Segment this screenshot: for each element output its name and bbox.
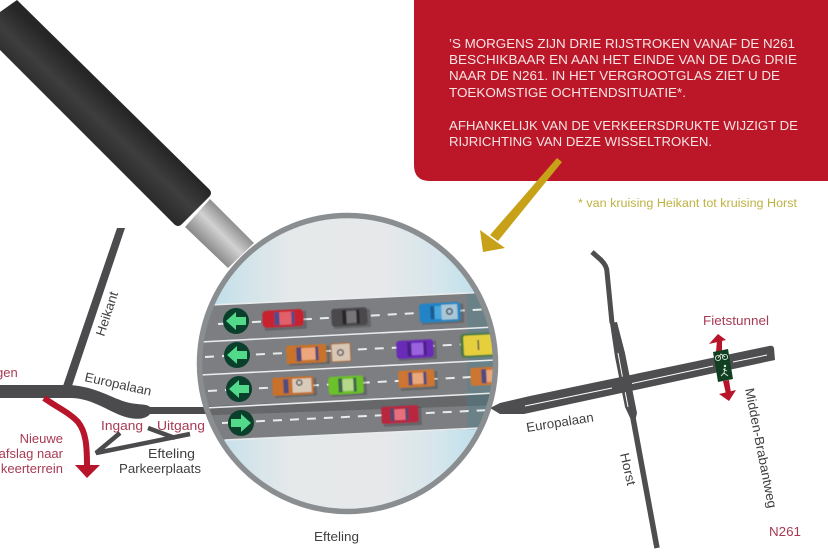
road: Heikant xyxy=(63,228,125,386)
car: orange, lane three centre xyxy=(398,369,438,391)
road: Efteling parking entrance and exit xyxy=(96,428,190,453)
road: Horst xyxy=(592,252,657,548)
road label: Europalaan east: Europalaan xyxy=(525,410,595,435)
car: dark grey xyxy=(331,307,371,329)
text: morning lanes explanation: RIJRICHTING VAN DEZE WISSELTROKEN. xyxy=(449,134,712,149)
label: Efteling Parkeerplaats xyxy=(119,446,202,476)
lens rim xyxy=(200,216,496,512)
label: Efteling: Efteling xyxy=(314,529,359,544)
label: new exit to parking area: afslag naar xyxy=(0,446,64,461)
car: purple xyxy=(396,339,437,361)
arrow: tunnel down xyxy=(719,380,736,401)
signal: left arrow lane three xyxy=(226,376,252,402)
text: morning lanes explanation: AFHANKELIJK VAN DE VERKEERSDRUKTE WIJZIGT DE xyxy=(449,118,798,133)
label: new exit to parking area: keerterrein xyxy=(1,461,63,476)
handle grip xyxy=(0,0,211,226)
label: Ingang: Ingang xyxy=(101,418,143,433)
label: new exit to parking area xyxy=(0,431,64,476)
car: orange, lane three right xyxy=(469,366,493,386)
road in lens xyxy=(190,292,500,441)
signal: right arrow lane four xyxy=(228,410,254,436)
road label: Heikant: Heikant xyxy=(93,289,121,338)
label: Fietstunnel: Fietstunnel xyxy=(703,313,769,328)
signal: left arrow lane two xyxy=(224,342,250,368)
panel: red explanation box xyxy=(414,0,828,181)
label: Efteling Parkeerplaats: Parkeerplaats xyxy=(119,461,202,476)
cars xyxy=(262,302,501,427)
arrow: new exit to parking area xyxy=(44,398,100,478)
magnifying glass xyxy=(0,0,505,520)
signal: left arrow lane one xyxy=(223,308,249,334)
lane markings xyxy=(200,292,495,440)
text: morning lanes explanation: TOEKOMSTIGE OCHTENDSITUATIE*. xyxy=(449,85,686,100)
car: blue xyxy=(419,302,464,325)
icon: cyclist and pedestrian sign xyxy=(713,349,733,382)
car: orange with beige load, lane three xyxy=(272,376,317,398)
road label: Midden-Brabantweg: Midden-Brabantweg xyxy=(742,387,780,509)
car: yellow xyxy=(460,332,497,358)
label: Uitgang: Uitgang xyxy=(157,418,205,433)
text: morning lanes explanation: NAAR DE N261. IN HET VERGROOTGLAS ZIET U DE xyxy=(449,68,780,83)
road label: Europalaan west: Europalaan xyxy=(83,369,153,399)
arrow: gold pointer to magnifier xyxy=(480,158,562,252)
label: Efteling Parkeerplaats: Efteling xyxy=(148,446,195,461)
car: red xyxy=(262,309,307,331)
text: morning lanes explanation: BESCHIKBAAR EN AAN HET EINDE VAN DE DAG DRIE xyxy=(449,52,797,67)
label: N261: N261 xyxy=(769,524,801,539)
car: crimson, lane four xyxy=(381,405,422,427)
cycle tunnel with arrows xyxy=(709,334,736,401)
arrow: tunnel up xyxy=(709,334,726,352)
text: morning lanes explanation: ’S MORGENS ZIJN DRIE RIJSTROKEN VANAF DE N261 xyxy=(449,36,795,51)
label: new exit to parking area: Nieuwe xyxy=(20,431,63,446)
handle neck xyxy=(185,199,254,268)
car: green xyxy=(328,375,367,397)
car: beige box on orange xyxy=(331,343,351,362)
road label: Horst: Horst xyxy=(617,451,639,487)
road: Europalaan east xyxy=(490,346,775,414)
footnote: * van kruising Heikant tot kruising Horst xyxy=(578,198,798,210)
road: Europalaan west xyxy=(0,385,210,419)
car: orange, lane two xyxy=(286,344,330,366)
text: morning lanes explanation xyxy=(449,36,798,149)
lens xyxy=(202,218,493,509)
